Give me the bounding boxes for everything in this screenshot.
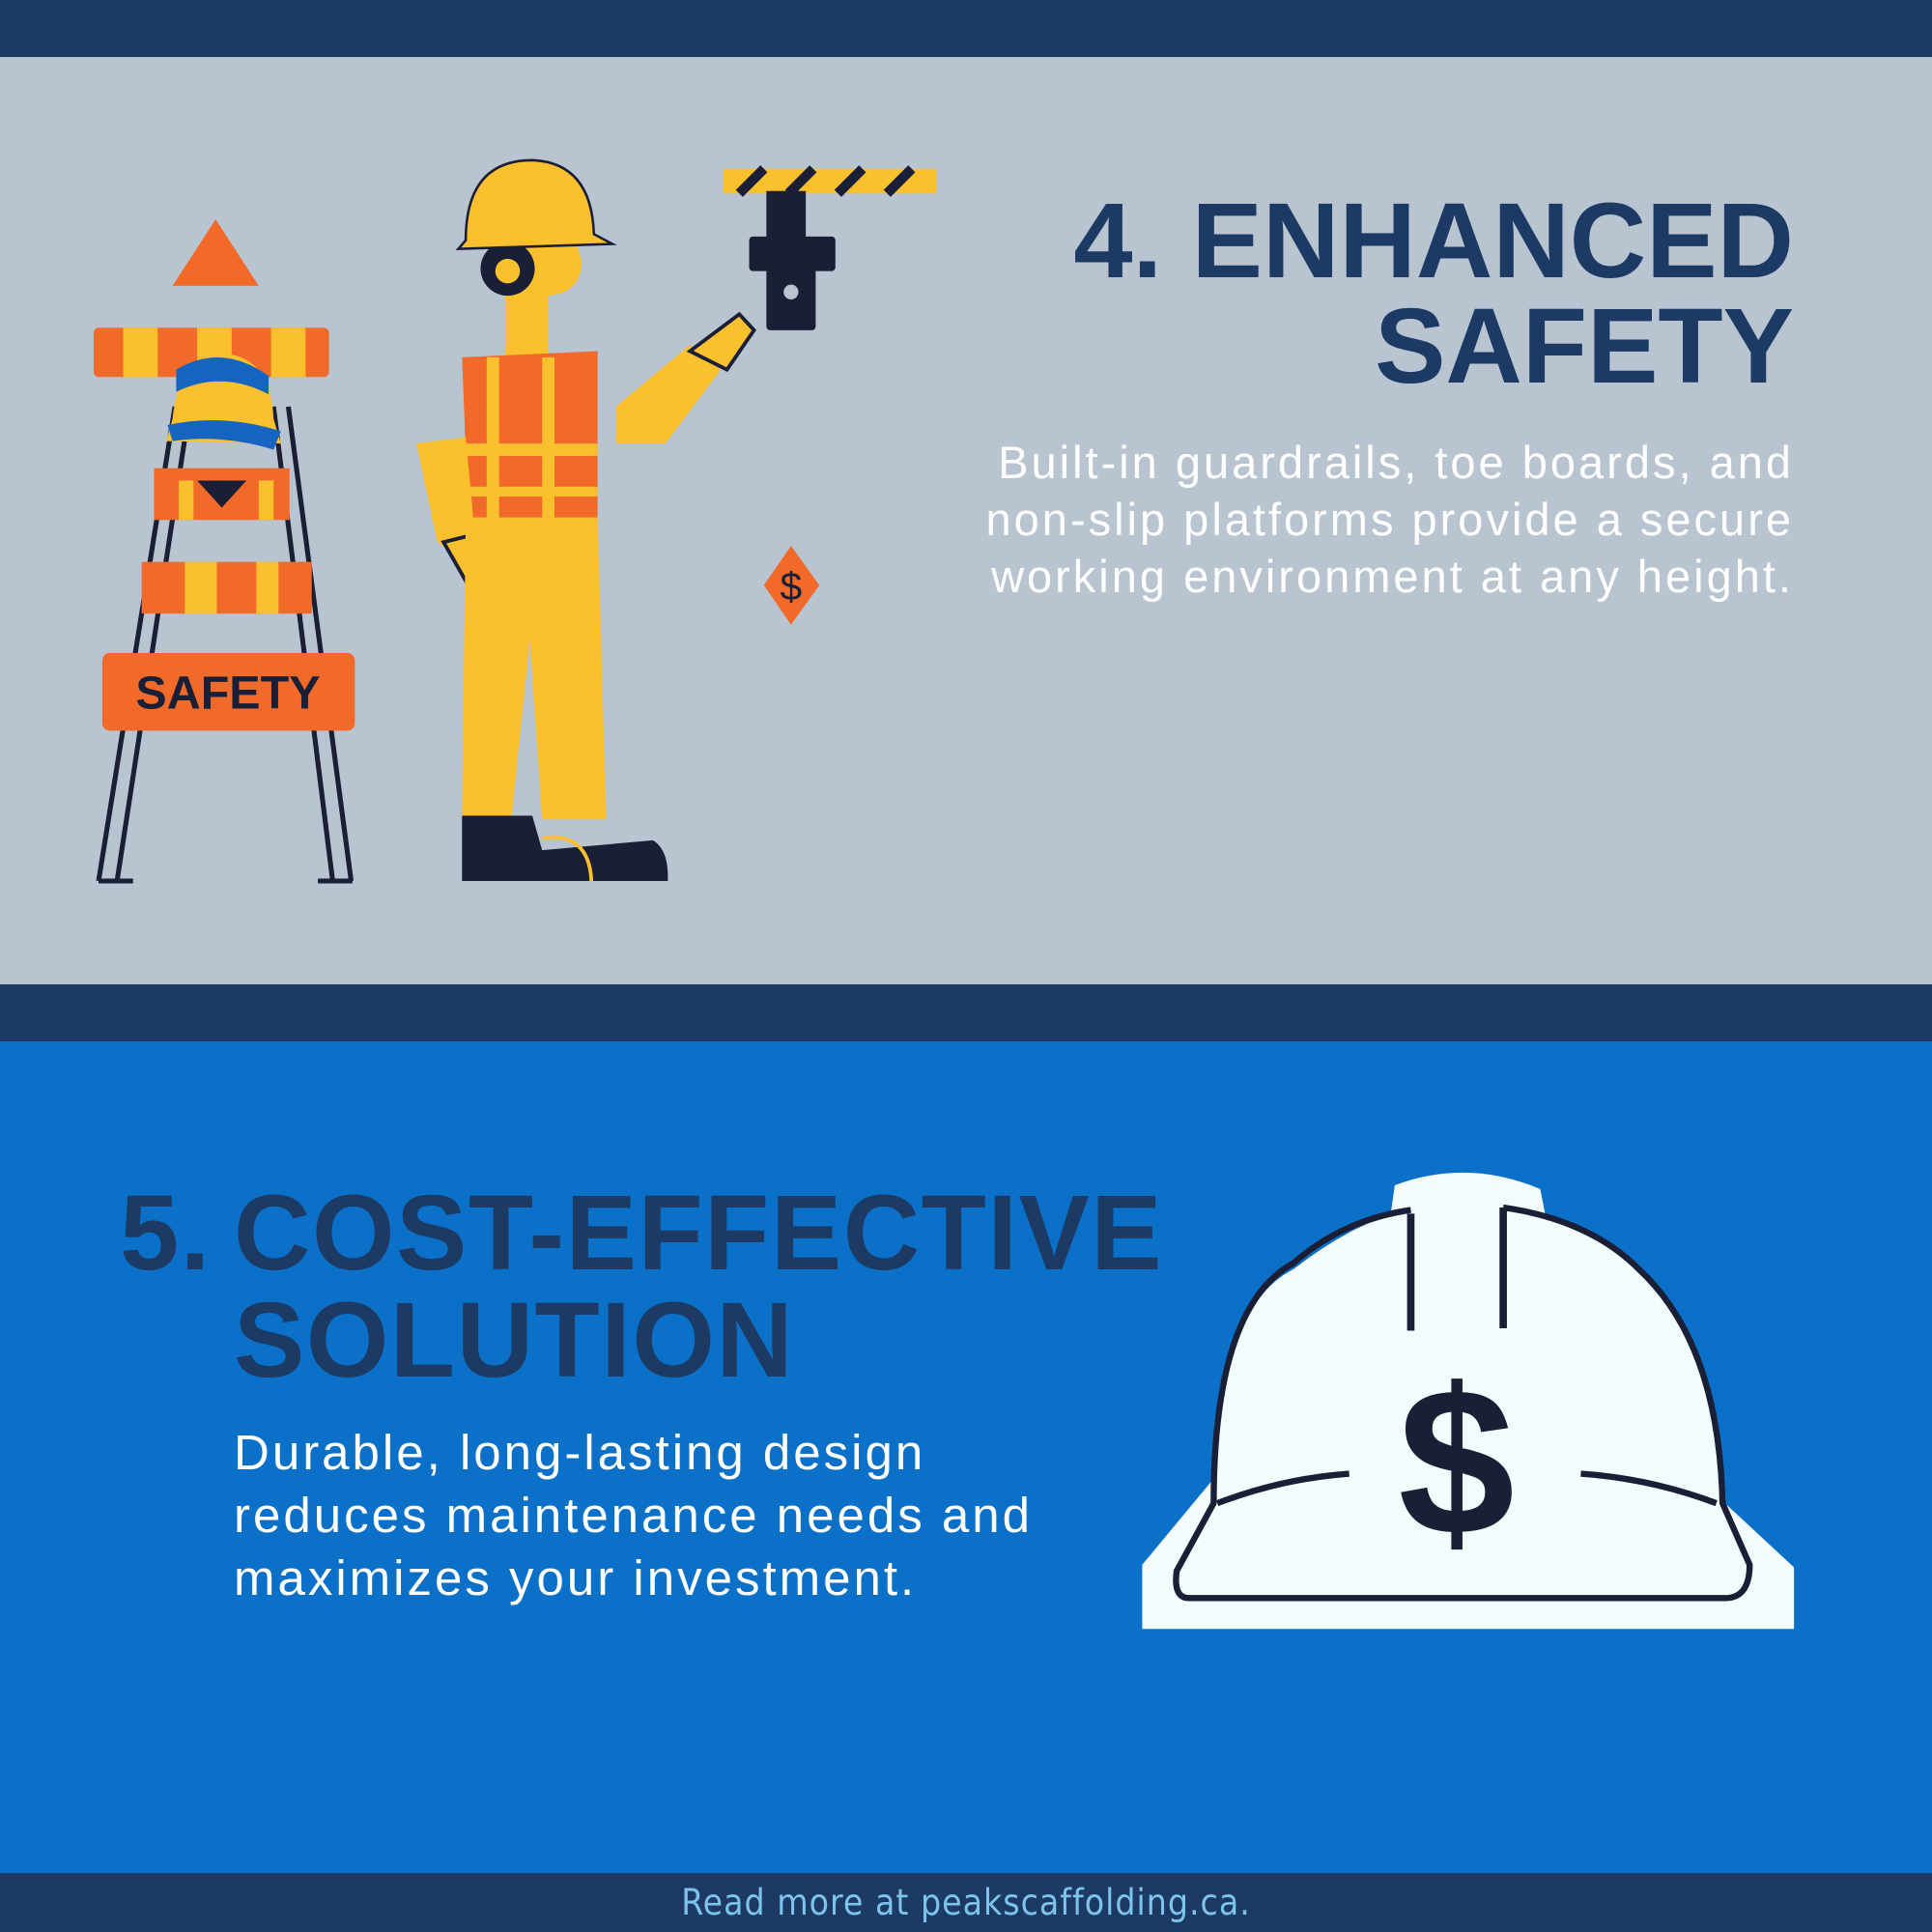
- icon: barricade ladder: SAFETY: [135, 667, 321, 719]
- divider bar: [0, 984, 1932, 1041]
- title: 4. enhanced safety: [1073, 182, 1794, 406]
- icon: dollar diamond: $: [781, 564, 803, 609]
- panel: cost-effective: [0, 1041, 1932, 1873]
- title: 5. cost-effective solution: 5.: [120, 1174, 212, 1293]
- title: 4. enhanced safety: 4. ENHANCED: [1073, 182, 1794, 300]
- text block: safety description: [986, 437, 1794, 602]
- text block: cost description: reduces maintenance needs and: [234, 1488, 1033, 1543]
- footer: Read more at peakscaffolding.ca.: [681, 1882, 1251, 1923]
- icon: hard hat with dollar: $: [1398, 1345, 1515, 1578]
- top bar: [0, 0, 1932, 57]
- text block: safety description: working environment at any height.: [991, 551, 1794, 602]
- icon: hard hat with dollar: [1142, 1173, 1794, 1629]
- footer: [0, 1873, 1932, 1932]
- icon: barricade ladder: [94, 219, 355, 881]
- icon: worker: [416, 160, 754, 881]
- text block: safety description: non-slip platforms provide a secure: [986, 494, 1794, 545]
- title: 4. enhanced safety: SAFETY: [1375, 287, 1794, 406]
- title: 5. cost-effective solution: SOLUTION: [234, 1281, 794, 1400]
- icon: dollar diamond: [764, 546, 819, 625]
- text block: cost description: [234, 1425, 1033, 1605]
- panel: enhanced safety: [0, 57, 1932, 984]
- text block: cost description: maximizes your investment.: [234, 1550, 917, 1605]
- title: 5. cost-effective solution: [120, 1174, 1163, 1400]
- title: 5. cost-effective solution: COST-EFFECTIVE: [234, 1174, 1163, 1293]
- icon: hazard barrier device: [724, 169, 936, 330]
- text block: safety description: Built-in guardrails, toe boards, and: [998, 437, 1794, 488]
- text block: cost description: Durable, long-lasting design: [234, 1425, 925, 1480]
